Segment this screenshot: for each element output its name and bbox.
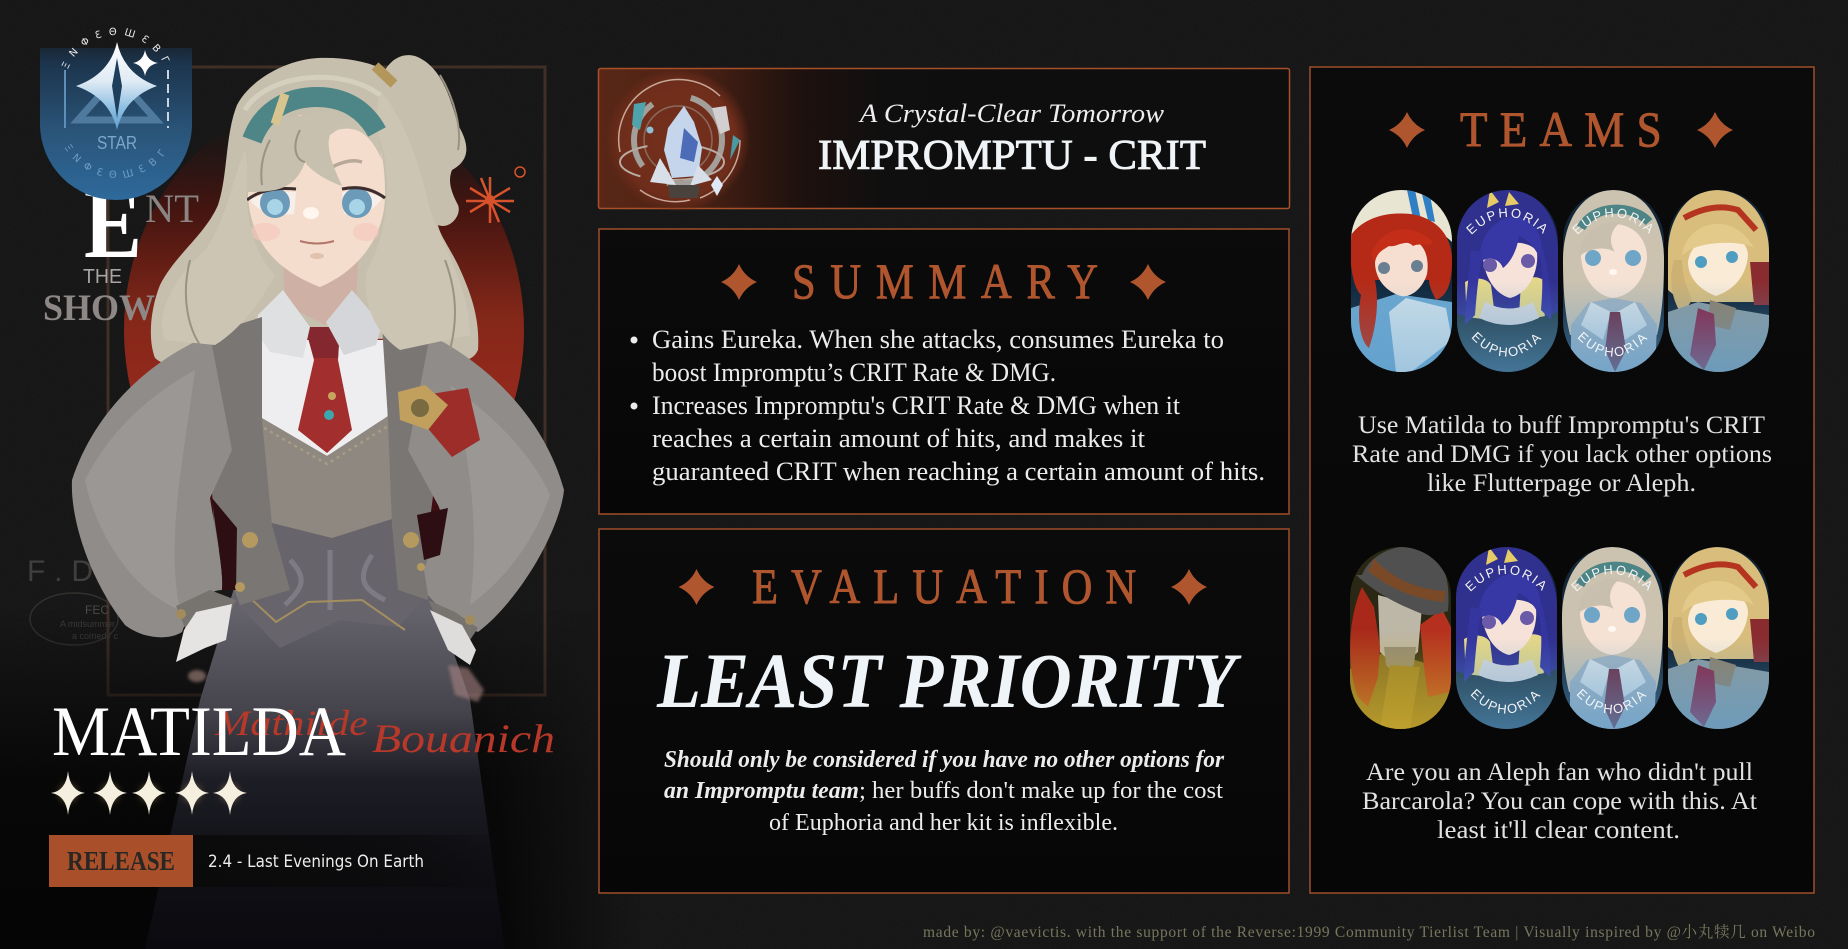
- release bar: 2.4 - Last Evenings On Earth: [208, 852, 424, 871]
- logo sparkle: [133, 50, 158, 76]
- team 1 text: Use Matilda to buff Impromptu's CRIT: [1358, 412, 1765, 439]
- gold buttons: [235, 532, 425, 592]
- evaluation text: [664, 747, 1225, 836]
- collar: [255, 290, 310, 358]
- evaluation text: of Euphoria and her kit is inflexible.: [769, 810, 1118, 836]
- summary bullets: Increases Impromptu's CRIT Rate & DMG when it: [652, 391, 1181, 420]
- portrait: purple hair euphoria: [1456, 547, 1557, 729]
- poster lettering: THE: [83, 266, 122, 288]
- red circle backdrop: [124, 100, 524, 560]
- arm gap right: [417, 508, 448, 560]
- bottom darkening of poster: [0, 635, 579, 949]
- evaluation text: ; her buffs don't make up for the cost: [859, 778, 1223, 804]
- nose highlight: [303, 207, 319, 219]
- portrait: matilda euphoria: EUPHORIA: [1572, 208, 1652, 234]
- evaluation text: Should only be considered if you have no other options for: [664, 747, 1225, 773]
- summary bullets: Gains Eureka. When she attacks, consumes Eureka to: [652, 325, 1224, 354]
- poster lettering: NT: [145, 186, 199, 231]
- back hair: [151, 55, 478, 364]
- portrait: purple hair euphoria: EUPHORIA: [1472, 332, 1542, 357]
- sleeve right: [408, 335, 564, 632]
- portrait: blonde: [1668, 547, 1769, 729]
- shirt: [260, 340, 388, 456]
- character art panel: [0, 28, 579, 949]
- script signature: Bouanich: [372, 716, 555, 761]
- credits: made by: @vaevictis. with the support of the Reverse:1999 Community Tierlist Team | Visually inspired by @小丸犊几 on Weibo: [923, 923, 1815, 941]
- portrait: matilda euphoria: EUPHORIA: [1576, 688, 1646, 714]
- team type: IMPROMPTU - CRIT: [818, 133, 1206, 179]
- front hair: [365, 90, 470, 350]
- vest: [262, 416, 396, 545]
- release bar: RELEASE: [67, 846, 175, 876]
- script signature: [214, 703, 555, 761]
- summary bullets: [630, 325, 1265, 486]
- panel: psychube header: [598, 68, 1290, 212]
- neck: [283, 262, 358, 325]
- portrait: matilda euphoria: [1563, 190, 1664, 372]
- panel: evaluation: [599, 529, 1289, 893]
- skirt: [145, 585, 505, 949]
- portrait: purple hair euphoria: [1457, 190, 1558, 372]
- faded poster caption: a comedy c: [72, 631, 119, 641]
- portrait: matilda euphoria: EUPHORIA: [1578, 332, 1648, 357]
- portrait: hat man: [1350, 546, 1451, 729]
- summary bullets: reaches a certain amount of hits, and makes it: [652, 424, 1146, 453]
- portrait: matilda euphoria: EUPHORIA: [1571, 565, 1652, 592]
- face: [248, 115, 385, 287]
- team 1 text: Rate and DMG if you lack other options: [1352, 441, 1772, 468]
- logo star: [76, 42, 157, 130]
- character name: MATILDA: [52, 693, 346, 771]
- panel: teams: [1309, 66, 1815, 894]
- verdict: LEAST PRIORITY: [656, 637, 1242, 724]
- logo side lines: [64, 70, 66, 128]
- asterisk ornament: [466, 167, 525, 223]
- portrait: purple hair euphoria: EUPHORIA: [1465, 565, 1546, 592]
- team 2 text: Are you an Aleph fan who didn't pull: [1366, 759, 1753, 786]
- faded poster caption: FEC: [85, 603, 109, 617]
- summary bullets: guaranteed CRIT when reaching a certain amount of hits.: [652, 457, 1265, 486]
- faded poster caption: F . D: [27, 555, 93, 588]
- mouth: [300, 241, 334, 244]
- eyes: [247, 161, 385, 218]
- portrait: purple hair euphoria: EUPHORIA: [1470, 688, 1541, 714]
- circular text bottom: ΞNΦƐΘШƐBΓ: [64, 144, 164, 178]
- logo triangle: [78, 76, 156, 120]
- rarity stars: [51, 771, 247, 815]
- panel: summary: [599, 229, 1289, 514]
- release bar: [49, 835, 523, 887]
- poster lettering: E: [84, 168, 142, 279]
- hair strands: [186, 75, 459, 350]
- headband: [252, 97, 377, 140]
- corset: [235, 518, 428, 648]
- character illustration: [72, 55, 564, 949]
- star label: STAR: [97, 133, 137, 153]
- portrait: matilda euphoria: [1562, 547, 1663, 729]
- sleeve left: [72, 335, 232, 637]
- faded poster caption: [27, 555, 119, 645]
- heading: evaluation: EVALUATION: [752, 560, 1136, 615]
- heading: teams: TEAMS: [1460, 103, 1662, 158]
- poster lettering: SHOW: [43, 288, 155, 329]
- heading: summary: [721, 255, 1166, 310]
- faded poster caption: A midsummer: [60, 619, 115, 629]
- team 1 portraits: [1351, 190, 1769, 372]
- team 2 text: [1362, 759, 1757, 844]
- team 1 text: like Flutterpage or Aleph.: [1427, 470, 1696, 497]
- heading: summary: SUMMARY: [792, 255, 1098, 310]
- circular text top: ΞNΦƐΘШƐBΓ: [62, 28, 170, 69]
- portrait: red hair: [1350, 190, 1452, 372]
- arm gap left: [212, 498, 237, 590]
- poster frame: [108, 67, 545, 695]
- star badge: [40, 28, 192, 200]
- poster lettering: [43, 168, 199, 329]
- psychube name: A Crystal-Clear Tomorrow: [858, 99, 1165, 128]
- cuffs: [176, 590, 478, 665]
- script signature: Mathilde: [214, 703, 368, 743]
- portrait: purple hair euphoria: EUPHORIA: [1466, 208, 1546, 234]
- heading: teams: [1389, 103, 1733, 158]
- summary bullets: boost Impromptu’s CRIT Rate & DMG.: [652, 358, 1056, 387]
- team 1 text: [1352, 412, 1772, 497]
- bow and brooch: [398, 385, 480, 457]
- portrait: blonde: [1668, 190, 1769, 372]
- team 2 portraits: [1350, 547, 1769, 729]
- team 2 text: Barcarola? You can cope with this. At: [1362, 788, 1757, 815]
- tie: [298, 327, 352, 453]
- team 2 text: least it'll clear content.: [1437, 817, 1680, 844]
- evaluation text: an Impromptu team: [664, 778, 859, 804]
- icon: crystal psychube: [606, 68, 750, 212]
- hands: [188, 665, 484, 702]
- jacket fronts: [205, 317, 290, 605]
